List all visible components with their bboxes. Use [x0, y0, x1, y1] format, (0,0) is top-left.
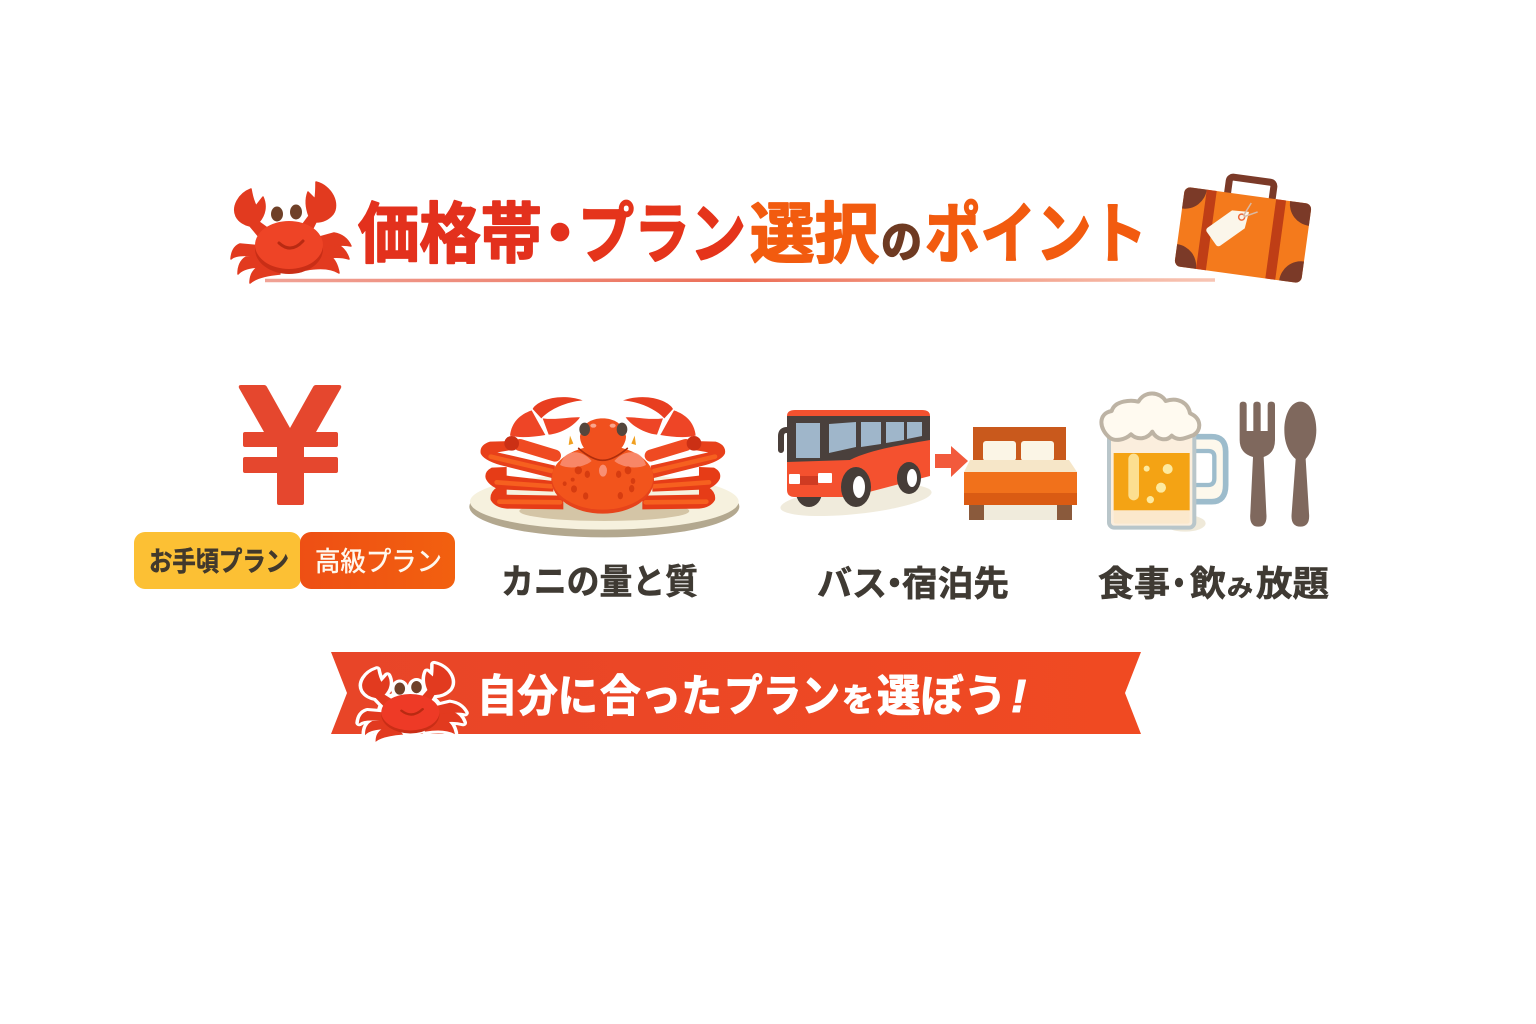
banner ribbon — [331, 652, 1141, 734]
banner text: ! — [1011, 670, 1026, 722]
badge: affordable plan — [134, 532, 301, 589]
title: 選択 — [750, 197, 879, 271]
title: の — [881, 218, 922, 267]
icon: title crab — [231, 182, 351, 283]
spoon — [1284, 402, 1316, 527]
icon: bed — [964, 427, 1077, 520]
label: meals and all-you-can-drink: ・ — [1164, 565, 1194, 604]
title: プラン — [578, 197, 746, 271]
crab body — [551, 418, 654, 514]
banner text: 合った — [600, 672, 722, 721]
icon: bus — [779, 410, 933, 522]
icon: suitcase — [1174, 171, 1314, 283]
icon: beer mug — [1101, 393, 1226, 532]
label: bus and accommodation — [817, 565, 1009, 604]
title: ポイント — [925, 197, 1147, 271]
plate — [469, 474, 739, 537]
icon: banner crab — [359, 664, 465, 741]
icon: yen symbol — [239, 385, 341, 505]
arrow: bus to hotel — [935, 446, 968, 477]
badge: premium plan: 高級プラン — [315, 547, 442, 577]
badge: affordable plan: お手頃プラン — [149, 547, 289, 577]
label: meals and all-you-can-drink: 食事 — [1098, 565, 1170, 604]
fork — [1240, 402, 1275, 527]
banner text: 選ぼう — [877, 672, 1007, 721]
label: crab amount and quality: カニの量と質 — [501, 563, 698, 602]
badge: premium plan — [300, 532, 455, 589]
title: ・ — [527, 197, 593, 271]
label: meals and all-you-can-drink — [1098, 565, 1329, 604]
banner text: プラン — [724, 672, 840, 721]
banner text: を — [842, 682, 874, 718]
label: meals and all-you-can-drink: 飲 — [1190, 565, 1226, 604]
title: 価格帯 — [358, 197, 542, 271]
label: bus and accommodation: バス — [817, 565, 887, 604]
label: meals and all-you-can-drink: 放題 — [1256, 565, 1329, 604]
icon: snow crab on plate — [469, 397, 739, 537]
label: bus and accommodation: 宿泊先 — [902, 565, 1009, 604]
banner text — [477, 670, 1026, 722]
label: meals and all-you-can-drink: み — [1227, 575, 1253, 602]
crab legs and claws — [481, 397, 725, 509]
banner text: 自分に — [477, 672, 598, 721]
title — [358, 197, 1147, 271]
title underline — [265, 278, 1215, 282]
icon: fork and spoon — [1240, 402, 1316, 527]
label: bus and accommodation: ・ — [877, 565, 912, 604]
